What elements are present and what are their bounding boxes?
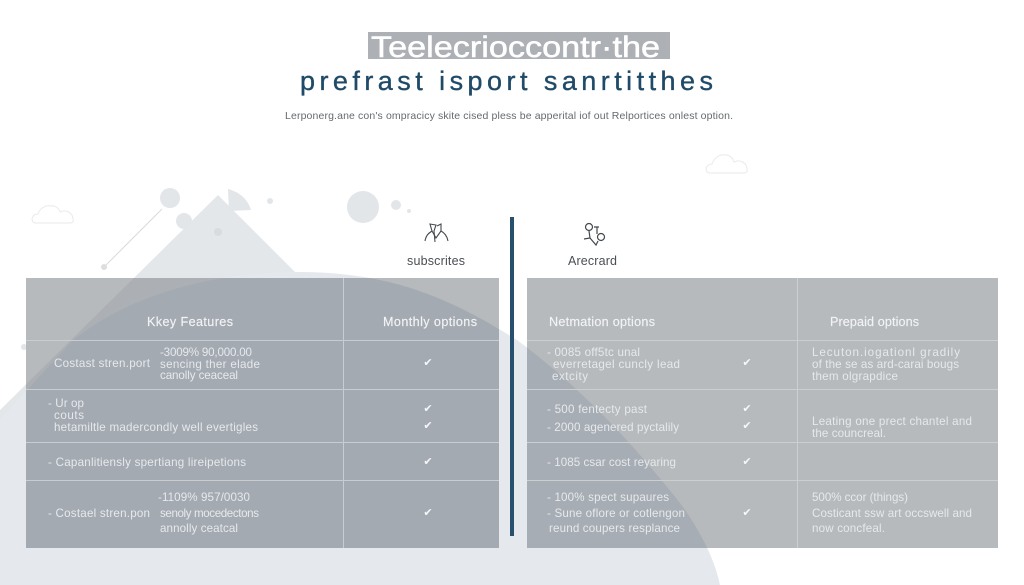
- row 1 text: [54, 346, 260, 382]
- netmation column text: - 100% spect supaures: [547, 491, 669, 504]
- row 2 text: couts: [54, 409, 84, 422]
- row 1 text: -3009% 90,000.00: [160, 346, 252, 359]
- row 4 text: -1109% 957/0030: [158, 491, 250, 504]
- prepaid column text: them olgrapdice: [812, 370, 898, 383]
- row 4 text: - Costael stren.pon: [48, 507, 150, 520]
- netmation column check marks: ✔: [742, 419, 752, 432]
- prepaid column text: 500% ccor (things): [812, 491, 908, 504]
- header: monthly options: Monthly options: [383, 315, 477, 329]
- monthly column check marks: ✔: [423, 356, 433, 369]
- icon: subscribers: [425, 224, 448, 242]
- prepaid column text: Costicant ssw art occswell and: [812, 507, 972, 520]
- netmation column check marks: ✔: [742, 455, 752, 468]
- title highlighted line: Teelecrioccontr·the: [371, 31, 660, 64]
- row 2 text: hetamiltle madercondly well evertigles: [54, 421, 258, 434]
- netmation column check marks: ✔: [742, 506, 752, 519]
- row 4 text: annolly ceatcal: [160, 522, 238, 535]
- netmation column text: extcity: [552, 370, 588, 383]
- header: prepaid options: Prepaid options: [830, 315, 919, 329]
- netmation column text: everretagel cuncly lead: [553, 358, 680, 371]
- label: subscribers: subscrites: [407, 254, 465, 268]
- panel: right comparison table: [527, 278, 998, 548]
- label: arecrard: Arecrard: [568, 254, 617, 268]
- netmation column text: - Sune oflore or cotlengon: [547, 507, 685, 520]
- prepaid column text: Leating one prect chantel and: [812, 415, 972, 428]
- icon: path nodes: [584, 224, 604, 245]
- netmation column text: - 1085 csar cost reyaring: [547, 456, 676, 469]
- netmation column text: - 0085 off5tc unal: [547, 346, 640, 359]
- prepaid column text: [812, 346, 972, 535]
- netmation column check marks: ✔: [742, 356, 752, 369]
- central vertical divider: [510, 217, 514, 536]
- icon: cloud left: [32, 206, 73, 223]
- title second line: prefrast isport sanrtitthes: [300, 66, 713, 96]
- row 1 text: Costast stren.port: [54, 357, 151, 370]
- netmation column text: - 500 fentecty past: [547, 403, 648, 416]
- prepaid column text: Lecuton.iogationl gradily: [812, 346, 960, 359]
- netmation column text: reund coupers resplance: [549, 522, 680, 535]
- background: mountain and hill shapes: [0, 195, 720, 585]
- monthly column check marks: ✔: [423, 455, 433, 468]
- prepaid column text: the councreal.: [812, 427, 886, 440]
- monthly column check marks: [423, 356, 433, 519]
- row 1 text: sencing ther elade: [160, 358, 260, 371]
- row 2 text: [48, 397, 258, 434]
- monthly column check marks: ✔: [423, 419, 433, 432]
- row 1 text: canolly ceaceal: [160, 369, 238, 382]
- panel: left comparison table: [26, 278, 499, 548]
- header: key features: Kkey Features: [147, 315, 233, 329]
- row 2 text: - Ur op: [48, 397, 84, 410]
- prepaid column text: now concfeal.: [812, 522, 885, 535]
- prepaid column text: of the se as ard-carai bougs: [812, 358, 959, 371]
- row 4 text: [48, 491, 259, 535]
- netmation column text: - 2000 agenered pyctalily: [547, 421, 679, 434]
- netmation column check marks: [742, 356, 752, 519]
- header: netmation options: Netmation options: [549, 315, 655, 329]
- icon: cloud right: [706, 155, 747, 173]
- subtitle: Lerponerg.ane con's ompracicy skite cised pless be apperital iof out Relportices onlest option.: [285, 110, 733, 122]
- row 3 text: - Capanlitiensly spertiang lireipetions: [48, 456, 246, 469]
- row 4 text: senoly mocedectons: [160, 507, 259, 520]
- monthly column check marks: ✔: [423, 402, 433, 415]
- netmation column check marks: ✔: [742, 402, 752, 415]
- monthly column check marks: ✔: [423, 506, 433, 519]
- background: decorative circles and pie: [21, 188, 411, 350]
- netmation column text: [547, 346, 685, 535]
